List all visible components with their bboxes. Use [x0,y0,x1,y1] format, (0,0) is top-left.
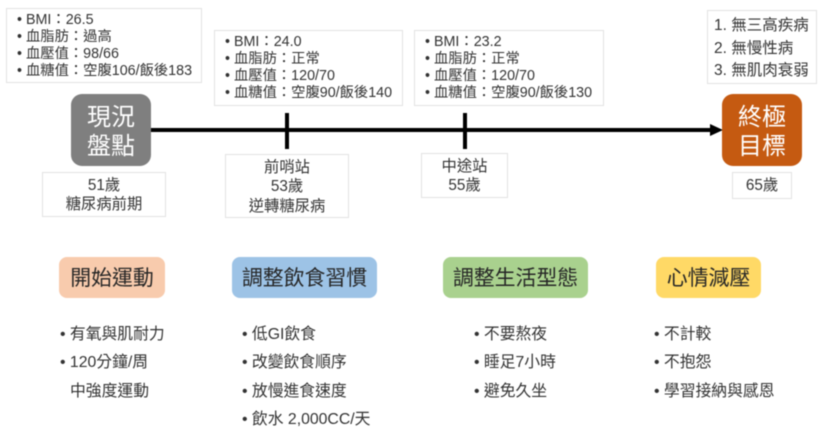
panel: ultimate goal list: 1. 無三高疾病 [714,17,809,34]
label: age 55 station [421,153,508,198]
heading: adjust diet [232,257,377,298]
panel: 53 years health data: • BMI：24.0 [225,34,302,50]
node: ultimate goal: 終極 [738,104,786,131]
label: age 55 station: 中途站 [442,158,487,175]
list: exercise: • 有氧與肌耐力 [60,326,165,343]
node: ultimate goal: 目標 [738,133,786,160]
heading: reduce stress: 心情減壓 [667,267,750,290]
list: stress relief [654,324,774,400]
list: lifestyle [474,324,556,400]
heading: adjust diet: 調整飲食習慣 [242,267,367,290]
list: lifestyle: • 不要熬夜 [474,326,547,343]
heading: start exercising: 開始運動 [70,267,154,290]
panel: 55 years health data: • 血壓值：120/70 [425,68,535,84]
list: lifestyle: • 睡足7小時 [474,354,556,371]
node: ultimate goal [722,94,802,166]
panel: current health data: • 血糖值：空腹106/飯後183 [17,63,192,79]
list: diet [242,324,370,428]
panel: 55 years health data: • BMI：23.2 [425,34,502,50]
list: exercise: • 120分鐘/周 [60,354,148,371]
list: stress relief: • 不抱怨 [654,354,711,371]
label: age 51: 糖尿病前期 [66,196,142,213]
node: current status [71,94,151,166]
label: age 53 station: 前哨站 [264,159,310,176]
label: age 53 station [225,154,349,218]
label: age 55 station: 55歲 [448,177,481,194]
panel: ultimate goal list [707,10,817,84]
label: age 65: 65歲 [746,177,778,194]
panel: 53 years health data: • 血脂肪：正常 [225,51,320,67]
heading: adjust lifestyle: 調整生活型態 [453,267,578,290]
list: lifestyle: • 避免久坐 [474,383,547,400]
panel: current health data: • BMI：26.5 [17,12,94,28]
panel: ultimate goal list: 2. 無慢性病 [714,40,793,57]
label: age 65 [732,172,792,199]
panel: 55 years health data [414,30,604,106]
panel: 53 years health data: • 血糖值：空腹90/飯後140 [225,85,392,101]
label: age 51: 51歲 [88,177,120,194]
heading: adjust lifestyle [443,257,588,298]
label: age 53 station: 逆轉糖尿病 [249,198,325,215]
panel: 55 years health data: • 血糖值：空腹90/飯後130 [425,85,592,101]
node: current status: 現況 [87,104,135,131]
list: stress relief: • 學習接納與感恩 [654,383,774,400]
list: stress relief: • 不計較 [654,326,711,343]
heading: reduce stress [656,257,761,298]
panel: 53 years health data: • 血壓值：120/70 [225,68,335,84]
heading: start exercising [59,257,165,298]
panel: current health data: • 血脂肪：過高 [17,29,112,45]
panel: 55 years health data: • 血脂肪：正常 [425,51,520,67]
list: exercise: 中強度運動 [70,383,149,400]
list: diet: • 低GI飲食 [242,326,316,343]
list: diet: • 放慢進食速度 [242,383,347,400]
list: exercise [60,324,165,400]
list: diet: • 改變飲食順序 [242,354,347,371]
label: age 53 station: 53歲 [271,178,303,195]
panel: current health data: • 血壓值：98/66 [17,46,119,62]
panel: ultimate goal list: 3. 無肌肉衰弱 [714,62,809,79]
list: diet: • 飲水 2,000CC/天 [242,411,370,428]
panel: current health data [6,8,202,83]
panel: 53 years health data [214,30,403,106]
label: age 51 [42,172,166,217]
node: current status: 盤點 [87,133,135,160]
